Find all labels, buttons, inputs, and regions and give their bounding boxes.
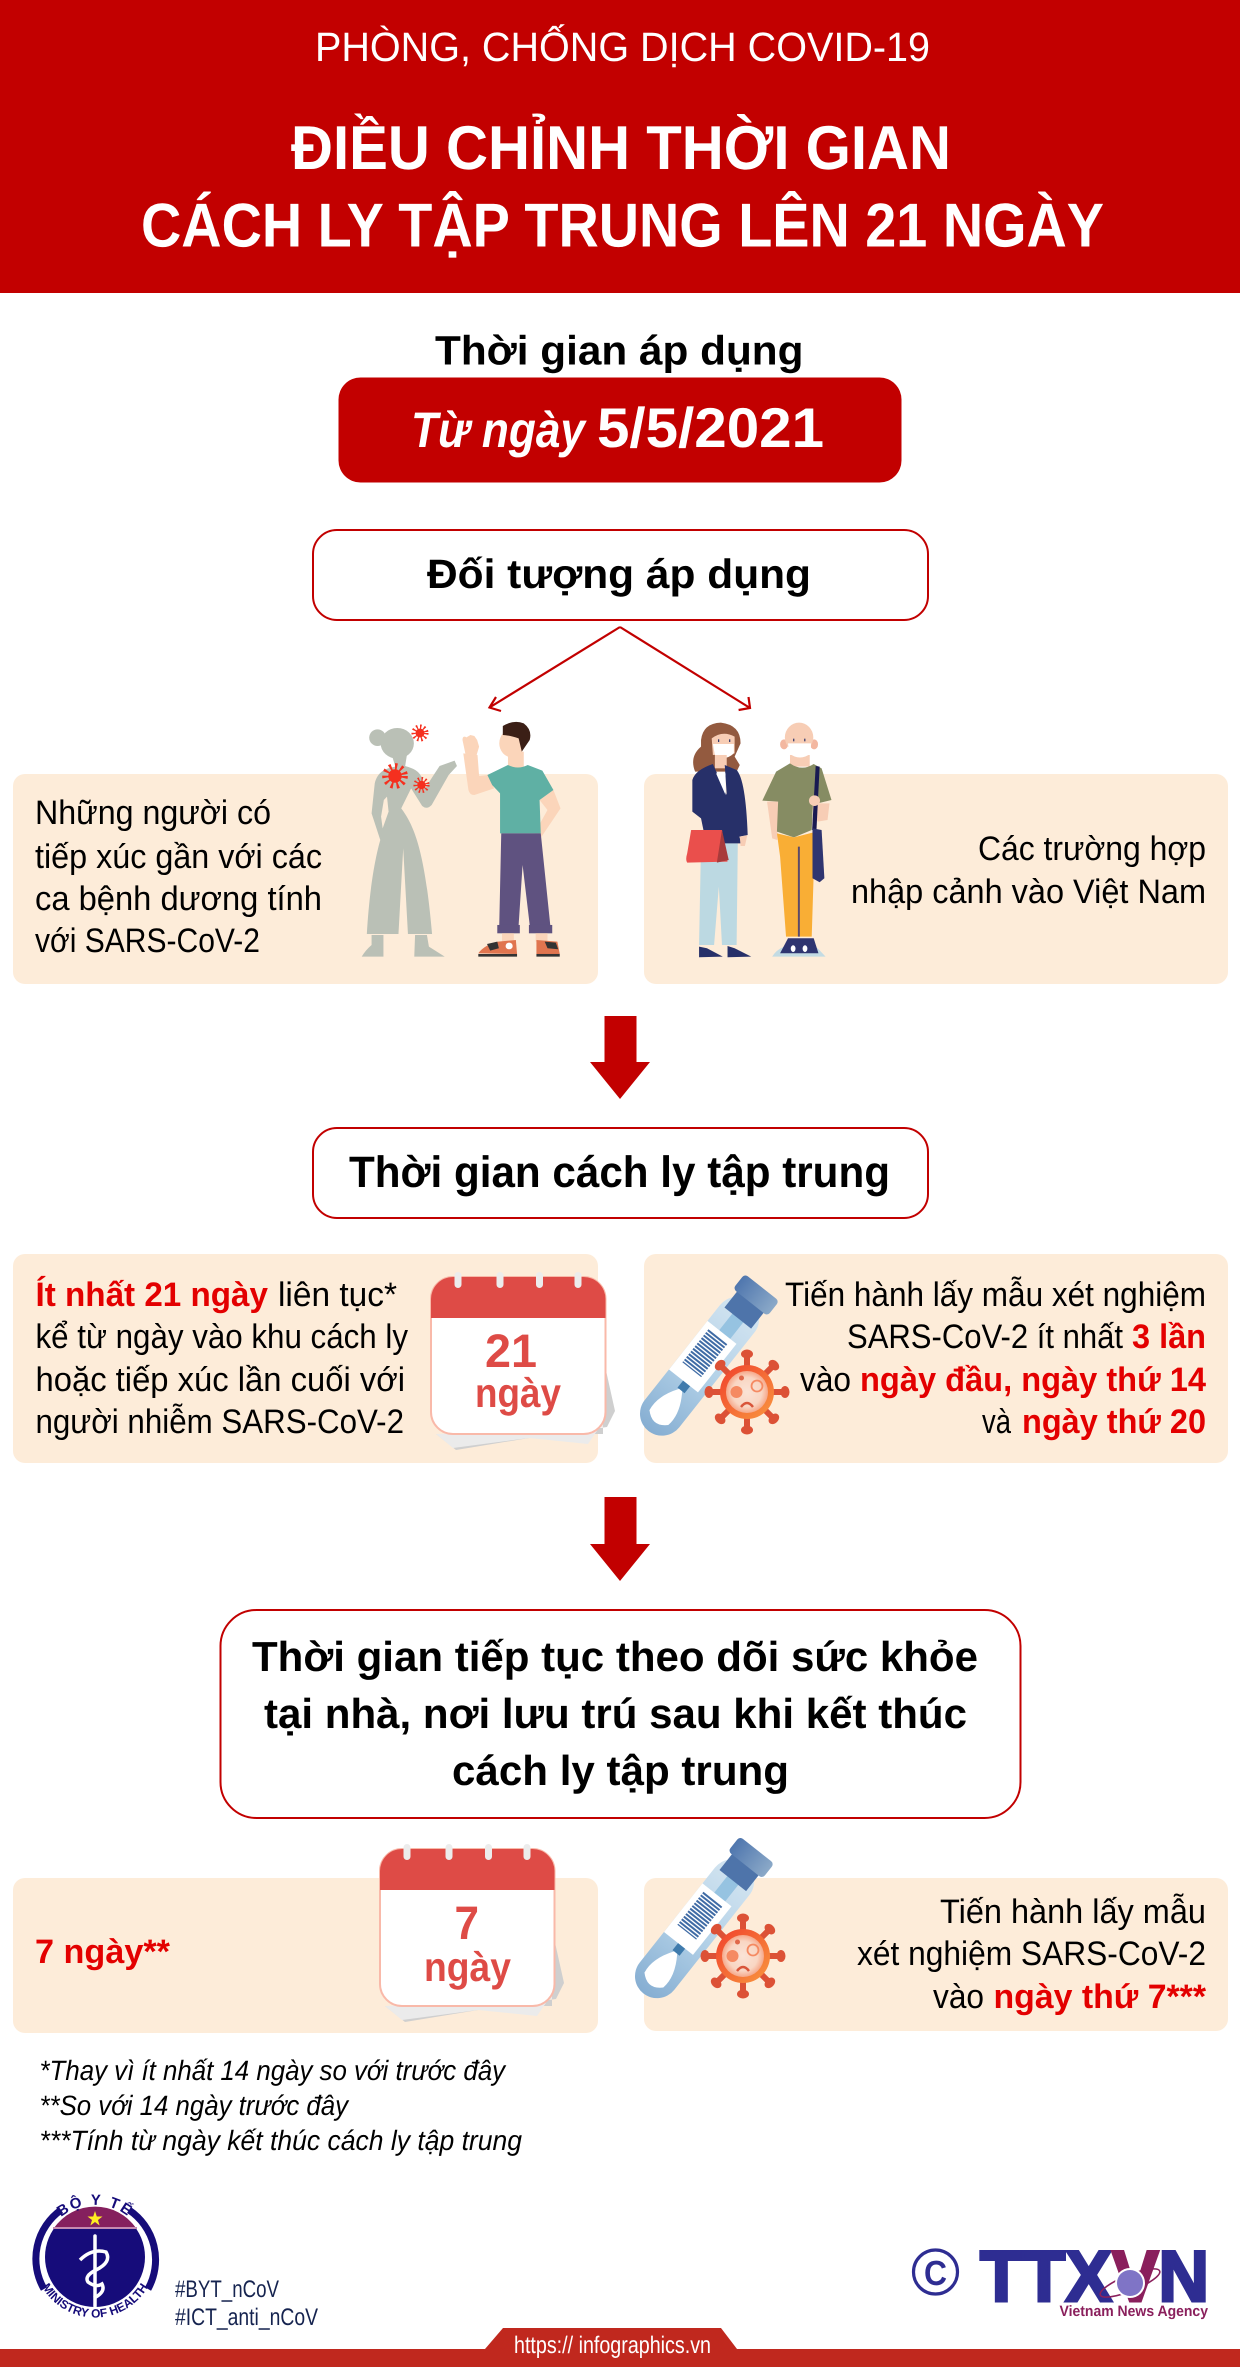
- text: 21 days description: người nhiễm SARS-CoV-2: [36, 1403, 404, 1441]
- icon: calendar 21 days: ngày: [475, 1370, 561, 1416]
- text: 7 days: 7 ngày**: [35, 1933, 171, 1971]
- panel: arrivals: [644, 723, 1228, 984]
- text: close contacts: Những người có: [35, 794, 271, 832]
- footnotes: **So với 14 ngày trước đây: [40, 2090, 350, 2121]
- title: [141, 113, 1104, 260]
- logo: copyright symbol: [914, 2250, 958, 2294]
- text: testing schedule: vào: [800, 1361, 851, 1399]
- title: ĐIỀU CHỈNH THỜI GIAN: [291, 113, 951, 183]
- icon: virus: [700, 1914, 786, 1998]
- footnotes: [40, 2055, 522, 2156]
- date badge: Từ ngày: [411, 402, 587, 458]
- box: home monitoring period: Thời gian tiếp tục theo dõi sức khỏe: [252, 1633, 978, 1680]
- panel: 21 days: [13, 1254, 615, 1463]
- icon: calendar 7 days: 7: [454, 1896, 479, 1949]
- icon: calendar 21 days: [431, 1272, 615, 1450]
- text: arrivals: [851, 830, 1206, 911]
- text: arrivals: nhập cảnh vào Việt Nam: [851, 873, 1206, 911]
- icon: virus: [704, 1350, 790, 1434]
- text: 21 days description: kể từ ngày vào khu cách ly: [36, 1318, 408, 1356]
- footnotes: *Thay vì ít nhất 14 ngày so với trước đây: [40, 2055, 507, 2086]
- text: testing schedule: và: [982, 1403, 1011, 1441]
- text: close contacts: ca bệnh dương tính: [35, 880, 322, 918]
- logo: Ministry of Health: [32, 2194, 160, 2318]
- text: testing schedule: ngày thứ 20: [1022, 1403, 1206, 1441]
- text: testing schedule: Tiến hành lấy mẫu xét nghiệm: [785, 1276, 1206, 1314]
- icon: test tube: [626, 1836, 774, 2007]
- title: CÁCH LY TẬP TRUNG LÊN 21 NGÀY: [141, 190, 1104, 260]
- footnotes: ***Tính từ ngày kết thúc cách ly tập trung: [40, 2125, 522, 2156]
- date badge: [338, 378, 902, 482]
- box: target groups: Đối tượng áp dụng: [427, 551, 811, 597]
- text: 21 days description: hoặc tiếp xúc lần cuối với: [36, 1361, 405, 1399]
- panel: close contacts: [13, 722, 598, 984]
- logo: TTXVN Vietnam News Agency: Vietnam News Agency: [1060, 2303, 1209, 2320]
- text: test on day 7: vào: [933, 1978, 984, 2016]
- split arrows: [490, 627, 750, 711]
- text: close contacts: với SARS-CoV-2: [35, 922, 260, 960]
- logo: Ministry of Health: BỘ Y TẾ: [56, 2194, 134, 2216]
- box: quarantine period: [313, 1128, 928, 1218]
- icon: test tube: [631, 1274, 779, 1445]
- footer bar with website tab: [0, 2328, 1240, 2367]
- hashtags: [175, 2276, 318, 2331]
- logo: TTXVN Vietnam News Agency: TTXVN: [980, 2237, 1209, 2317]
- icon: calendar 7 days: ngày: [424, 1944, 511, 1990]
- text: 21 days description: liên tục*: [278, 1276, 397, 1314]
- text: test on day 7: [857, 1893, 1207, 2016]
- icon: masked man: [762, 723, 831, 957]
- icon: masked woman: [686, 723, 751, 957]
- icon: calendar 21 days: 21: [485, 1324, 537, 1377]
- heading: application time: Thời gian áp dụng: [435, 328, 804, 374]
- box: home monitoring period: [220, 1610, 1020, 1818]
- text: 21 days description: [36, 1275, 408, 1441]
- icon: infected woman silhouette: [362, 727, 457, 957]
- text: 21 days description: Ít nhất 21 ngày: [36, 1275, 268, 1314]
- text: test on day 7: Tiến hành lấy mẫu: [940, 1893, 1206, 1931]
- arrow down 2: [590, 1497, 650, 1581]
- header banner: [0, 0, 1240, 293]
- text: test on day 7: xét nghiệm SARS-CoV-2: [857, 1935, 1206, 1973]
- date badge: 5/5/2021: [597, 396, 824, 459]
- text: testing schedule: [785, 1276, 1206, 1441]
- box: target groups: [313, 530, 928, 620]
- panel: testing 3 times: [631, 1254, 1228, 1463]
- text: close contacts: [35, 794, 322, 960]
- box: home monitoring period: cách ly tập trung: [452, 1747, 789, 1794]
- footer bar with website tab: https:// infographics.vn: [514, 2332, 711, 2359]
- text: testing schedule: ngày đầu, ngày thứ 14: [860, 1361, 1206, 1399]
- arrow down 1: [590, 1016, 650, 1099]
- header kicker: PHÒNG, CHỐNG DỊCH COVID-19: [315, 24, 930, 70]
- box: home monitoring period: tại nhà, nơi lưu trú sau khi kết thúc: [264, 1690, 967, 1737]
- text: test on day 7: ngày thứ 7***: [994, 1978, 1207, 2016]
- hashtags: #ICT_anti_nCoV: [175, 2304, 318, 2331]
- text: testing schedule: SARS-CoV-2 ít nhất: [847, 1318, 1123, 1356]
- hashtags: #BYT_nCoV: [175, 2276, 279, 2303]
- text: arrivals: Các trường hợp: [978, 830, 1206, 868]
- text: testing schedule: 3 lần: [1132, 1318, 1206, 1356]
- icon: calendar 7 days: [380, 1844, 564, 2022]
- box: quarantine period: Thời gian cách ly tập trung: [349, 1148, 890, 1197]
- logo: Ministry of Health: MINISTRY OF HEALTH: [44, 2282, 147, 2318]
- panel: 7 days: [13, 1844, 598, 2033]
- panel: test on day 7: [626, 1836, 1228, 2031]
- icon: man waving: [463, 722, 561, 957]
- text: close contacts: tiếp xúc gần với các: [35, 838, 322, 876]
- logo: copyright symbol: C: [924, 2254, 947, 2293]
